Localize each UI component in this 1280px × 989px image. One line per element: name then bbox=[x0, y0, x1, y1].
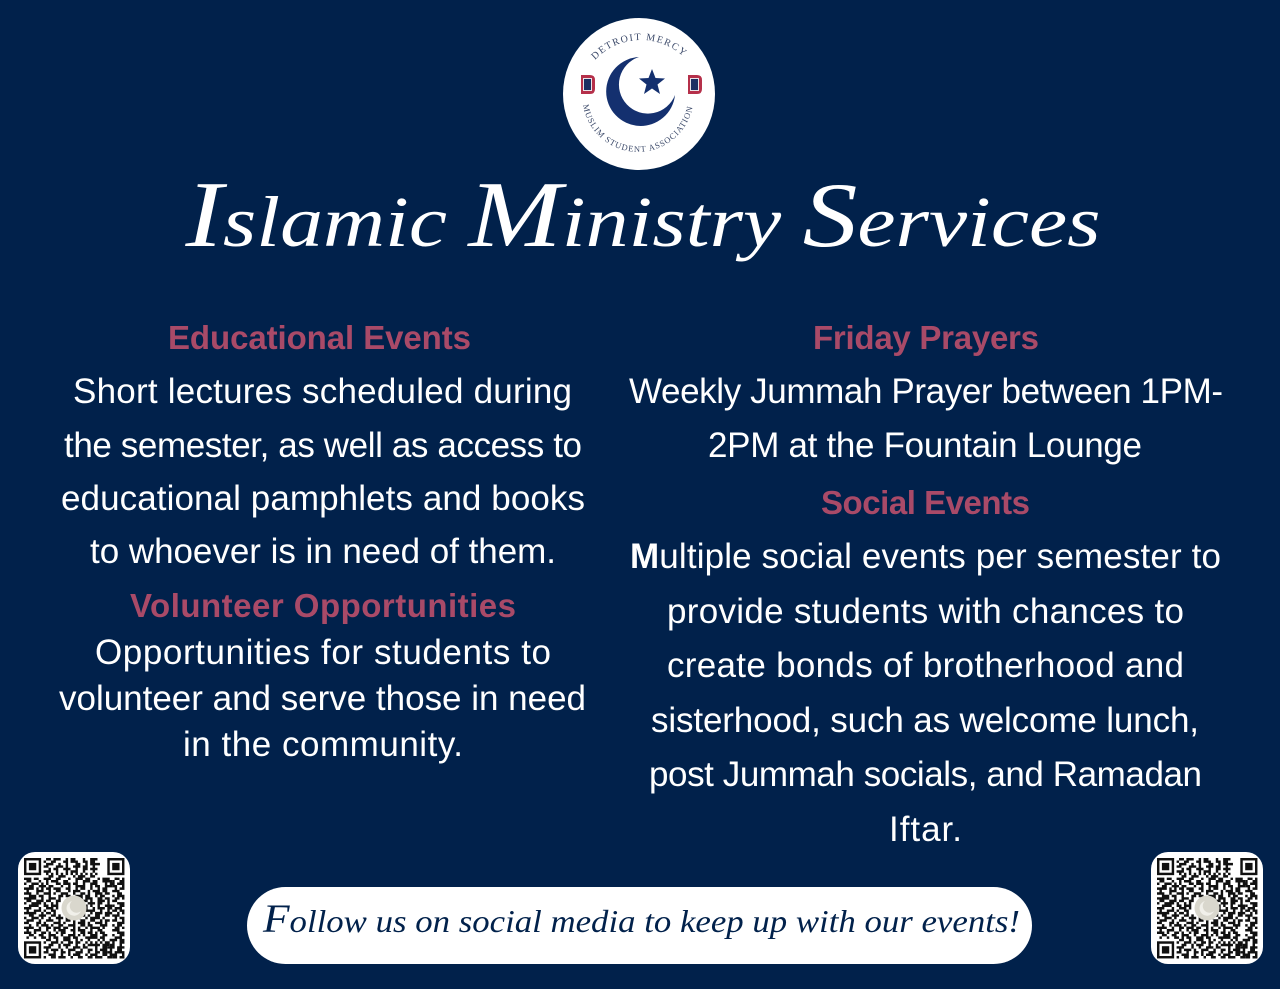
callout text: Follow us on social media to keep up with our events! bbox=[262, 896, 1020, 941]
text block: volunteer opportunities: in the community. bbox=[183, 725, 463, 764]
QR finder patterns bbox=[25, 859, 123, 957]
panel: left column bbox=[59, 319, 586, 764]
text block: Friday prayers: Weekly Jummah Prayer between 1PM- bbox=[629, 372, 1223, 411]
text block: Friday prayers bbox=[629, 372, 1223, 465]
text block: educational events bbox=[61, 372, 585, 571]
text block: volunteer opportunities bbox=[59, 633, 586, 764]
text block: social events: create bonds of brotherhood and bbox=[667, 646, 1184, 685]
icon: right D shield bbox=[688, 75, 702, 94]
text block: Friday prayers: 2PM at the Fountain Lounge bbox=[708, 426, 1142, 465]
text block: social events: provide students with chances to bbox=[667, 592, 1184, 631]
text block: volunteer opportunities: Opportunities for students to bbox=[95, 633, 551, 672]
QR code: left bbox=[18, 852, 130, 964]
text block: educational events: Short lectures scheduled during bbox=[73, 372, 572, 411]
logo bottom text: MUSLIM STUDENT ASSOCIATION bbox=[582, 104, 692, 152]
text block: social events: Iftar. bbox=[889, 810, 962, 849]
title: Islamic Ministry Services bbox=[184, 163, 1101, 267]
logo: Detroit Mercy Muslim Student Association bbox=[563, 18, 715, 170]
callout: social media pill bbox=[247, 887, 1032, 964]
QR right edge modules bbox=[107, 879, 124, 957]
icon: left D shield bbox=[581, 75, 595, 94]
text block: educational events: educational pamphlets and books bbox=[61, 479, 585, 518]
logo top text: DETROIT MERCY bbox=[590, 34, 687, 60]
icon: star bbox=[639, 69, 665, 94]
QR code: right bbox=[1151, 852, 1263, 964]
heading: Friday Prayers: Friday Prayers bbox=[813, 319, 1039, 356]
panel: right column bbox=[629, 319, 1223, 849]
text block: social events: sisterhood, such as welcome lunch, bbox=[651, 701, 1199, 740]
text block: social events: post Jummah socials, and Ramadan bbox=[649, 755, 1202, 794]
text block: educational events: the semester, as well as access to bbox=[64, 426, 582, 465]
icon: crescent bbox=[606, 57, 675, 126]
text block: social events bbox=[630, 537, 1221, 849]
heading: Volunteer Opportunities: Volunteer Opportunities bbox=[130, 587, 516, 624]
text block: educational events: to whoever is in need of them. bbox=[90, 532, 556, 571]
heading: Social Events: Social Events bbox=[821, 484, 1030, 521]
text block: volunteer opportunities: volunteer and serve those in need bbox=[59, 679, 586, 718]
heading: Educational Events: Educational Events bbox=[168, 319, 471, 356]
text block: social events: Multiple social events per semester to bbox=[630, 537, 1221, 576]
